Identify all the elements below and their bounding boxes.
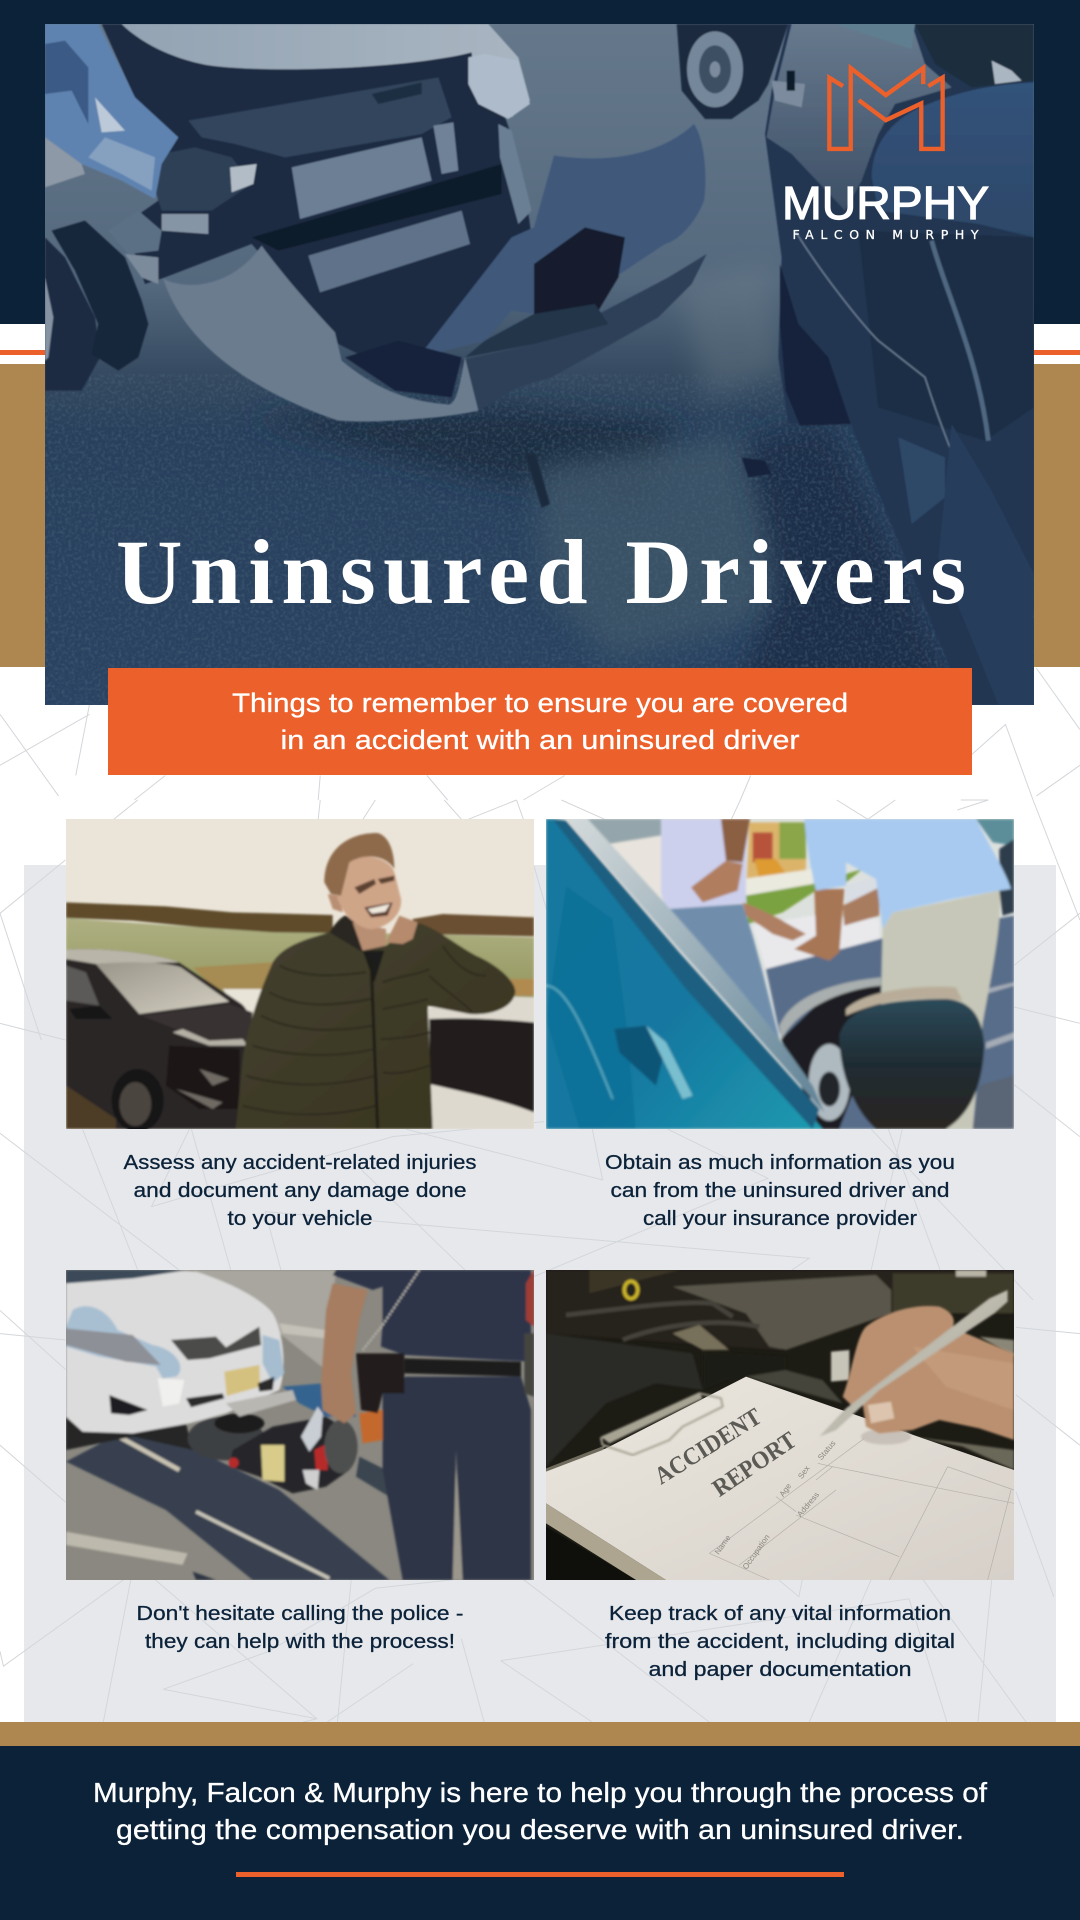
caption: obtain information: Obtain as much information as you xyxy=(605,1151,955,1174)
hand xyxy=(843,1306,1014,1440)
left wheel xyxy=(45,237,100,391)
photo: accident report being filled in xyxy=(546,1270,1014,1580)
headlight fender xyxy=(45,24,178,199)
band: orange stripe xyxy=(0,350,1080,355)
band: bottom tan xyxy=(0,1722,1080,1746)
band: tan xyxy=(0,364,1080,667)
woman xyxy=(661,819,749,909)
caption: call the police xyxy=(136,1602,464,1653)
bumper xyxy=(418,124,705,357)
form labels: Age xyxy=(778,1481,793,1498)
mirror xyxy=(846,987,963,1016)
motorcycle xyxy=(188,1416,264,1460)
man xyxy=(843,887,879,926)
subtitle banner xyxy=(108,668,972,775)
officer xyxy=(453,1470,464,1580)
logo: Murphy Falcon Murphy xyxy=(782,64,989,242)
form labels xyxy=(713,1439,837,1571)
accident report text: ACCIDENT xyxy=(650,1403,767,1490)
icon: orange M mark xyxy=(827,64,945,152)
right car xyxy=(765,24,1034,705)
hood xyxy=(122,24,530,117)
logo wordmark: FALCON MURPHY xyxy=(792,227,979,242)
caption: obtain information: can from the uninsured driver and xyxy=(610,1179,950,1202)
subtitle text: in an accident with an uninsured driver xyxy=(280,725,800,755)
caption: call the police: they can help with the process! xyxy=(145,1630,455,1653)
subtitle text xyxy=(232,688,848,755)
photo: injured man with neck pain xyxy=(66,819,534,1129)
footer text: Murphy, Falcon & Murphy is here to help you through the process of xyxy=(93,1777,987,1808)
pen xyxy=(819,1290,1008,1437)
photo: police officer at motorcycle accident xyxy=(66,1270,534,1580)
subtitle text: Things to remember to ensure you are covered xyxy=(232,688,848,718)
band: top navy xyxy=(0,0,1080,324)
footer text: getting the compensation you deserve with an uninsured driver. xyxy=(116,1814,964,1845)
form labels: Name xyxy=(713,1533,733,1556)
black car xyxy=(66,949,253,1129)
head xyxy=(353,922,386,951)
caption: keep track of information: and paper documentation xyxy=(648,1658,912,1681)
footer orange rule xyxy=(236,1872,844,1877)
white car xyxy=(66,1271,284,1433)
form labels: Address xyxy=(795,1490,821,1519)
footer text xyxy=(93,1777,988,1846)
rear car xyxy=(677,24,788,119)
caption: keep track of information: from the accident, including digital xyxy=(605,1630,955,1653)
form lines xyxy=(709,1438,1014,1580)
caption: obtain information xyxy=(605,1151,955,1230)
photo: two people exchanging information by blue car xyxy=(546,819,1014,1129)
accident report text: REPORT xyxy=(708,1427,802,1502)
accident report text xyxy=(650,1403,802,1502)
panel: footer xyxy=(0,1746,1080,1920)
caption: obtain information: call your insurance provider xyxy=(643,1207,917,1230)
gray car xyxy=(766,916,1014,1129)
jacket xyxy=(236,916,515,1129)
title: Uninsured Drivers xyxy=(116,521,966,623)
caption: assess injuries: Assess any accident-related injuries xyxy=(124,1151,476,1174)
caption: assess injuries xyxy=(123,1151,476,1230)
engine bay xyxy=(102,24,532,364)
blue car xyxy=(546,819,823,1129)
logo wordmark: MURPHY xyxy=(782,177,989,229)
form labels: Occupation xyxy=(741,1533,772,1571)
form labels: Status xyxy=(816,1439,837,1462)
caption: keep track of information: Keep track of any vital information xyxy=(609,1602,951,1625)
panel: gray content background xyxy=(24,865,1056,1722)
caption: assess injuries: and document any damage done xyxy=(134,1179,466,1202)
caption: call the police: Don't hesitate calling the police - xyxy=(136,1602,464,1625)
right white car xyxy=(428,997,534,1129)
caption: assess injuries: to your vehicle xyxy=(228,1207,372,1230)
caption: keep track of information xyxy=(605,1602,955,1681)
hero photo: wrecked car xyxy=(45,24,1034,705)
form labels: Sex xyxy=(796,1464,812,1480)
